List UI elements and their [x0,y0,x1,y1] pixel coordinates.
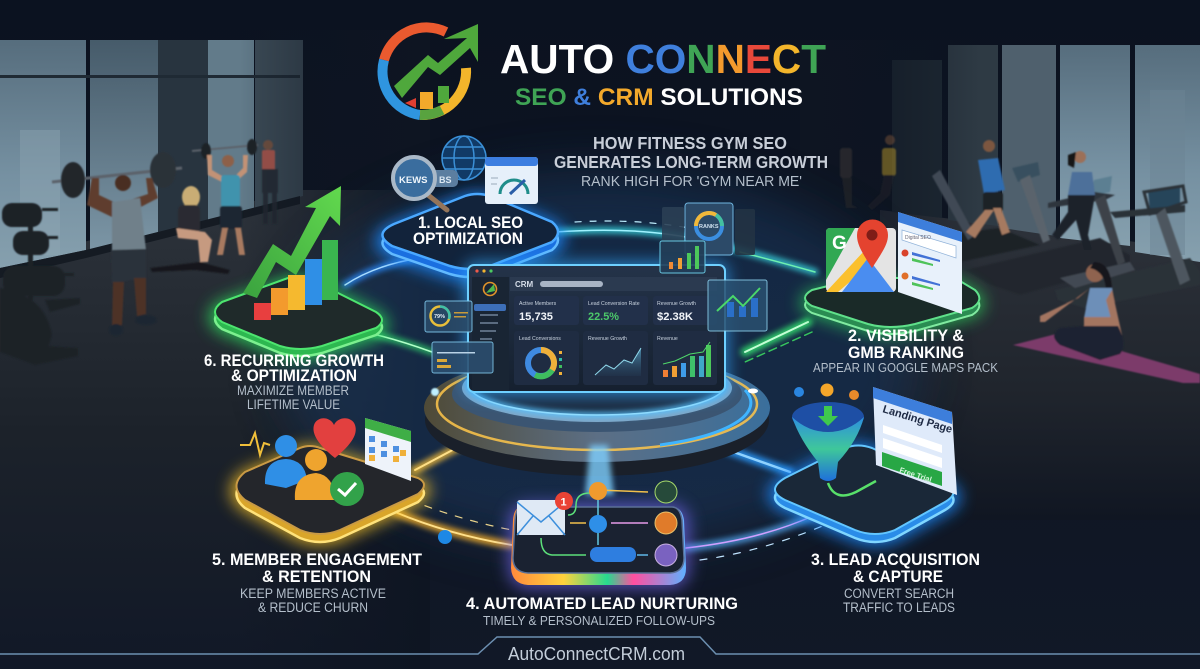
heading: subtitle: HOW FITNESS GYM SEO [593,133,787,153]
text: step 6: LIFETIME VALUE [247,397,340,412]
platform 1: local SEO [382,136,558,277]
chart: growth bars [254,240,338,320]
icon: speed gauge window [485,157,538,204]
text: step 3 [811,550,980,615]
icon: landing page form [873,387,957,495]
figure: dim runners [840,135,896,210]
panel: active members card: Active Members [519,301,557,307]
icon: orange member [295,449,335,500]
text: step 5: & REDUCE CHURN [258,600,368,615]
panel: platform base [511,507,686,585]
icon: keyword magnifier [393,157,458,210]
chart: lead conversions donut: Lead Conversions [519,336,561,342]
icon: globe [442,136,486,180]
heading: subtitle [554,133,828,190]
panel: left donut [425,301,472,332]
figure: standing person [262,140,278,224]
figure: man lifting barbell [52,152,182,336]
icon: map tile with pin: G [832,233,847,254]
floating panels around dashboard [425,203,767,373]
icon: map tile with pin [826,220,896,292]
text: step 4 [466,594,738,628]
panel: conversion rate card: 22.5% [588,311,619,323]
chart: logo bars [405,86,449,109]
text: step 5: 5. MEMBER ENGAGEMENT [212,550,423,569]
connector lines between platforms [345,221,825,560]
icon: ring logo [382,27,466,115]
central hub: pedestal disc [424,354,770,476]
panel: platform base [382,194,558,277]
arrow: 6 to hub connector [345,328,432,352]
text: step 6 [204,351,384,412]
icon: search results browser [898,212,962,314]
text: step 6: & OPTIMIZATION [231,366,357,385]
heading: subtitle: RANK HIGH FOR 'GYM NEAR ME' [581,173,802,190]
platform 6: recurring growth [204,186,384,412]
panel: active members card: 15,735 [519,311,553,323]
text: step 3: & CAPTURE [853,567,943,586]
figure: yoga woman on mat [1013,262,1200,383]
icon: keyword magnifier: BS [439,175,452,185]
text: step 1 title [413,213,523,248]
heading: subtitle: GENERATES LONG-TERM GROWTH [554,152,828,172]
sidebar menu [474,304,506,340]
panel: platform base [775,446,954,542]
logo [382,24,478,115]
icon: mail with badge [517,492,573,535]
panel: ranks donut: RANKS [699,224,719,230]
text: CRM header: CRM [515,280,534,289]
text: step 5: & RETENTION [262,567,371,586]
text: step 6: 6. RECURRING GROWTH [204,351,384,370]
icon: mini logo [484,282,496,296]
panel: platform base [805,278,979,334]
icon: treadmills [932,162,1200,308]
icon: search results browser: Digital SEO [905,235,931,241]
panel: line chart [708,280,767,331]
arrow: 4 to 5 connector [395,500,512,545]
arrow: 3 to 4 connector [686,515,825,560]
figure: runner woman [1052,151,1095,250]
platform 5: engagement [212,418,424,615]
panel: conversion rate card [583,296,648,325]
arrow: 6 to 1 connector [345,258,420,285]
footer [0,637,1200,664]
icon: conversion arrow [828,481,876,495]
panel: platform base [215,277,382,356]
text: step 3: CONVERT SEARCH [844,586,954,601]
panel: revenue growth card: $2.38K [657,311,693,323]
gym scene: treadmills, runners and yoga [840,135,1200,383]
icon: heart [313,418,356,458]
platform 2: visibility [805,212,998,375]
icon: pulse line [240,433,270,455]
chart: revenue bars: Revenue [657,336,678,342]
panel: revenue growth card [653,296,717,325]
panel: conversion rate card: Lead Conversion Rate [588,301,640,307]
text: step 2 [813,326,998,375]
CRM dashboard [468,265,725,392]
chart: revenue growth area [583,331,648,385]
text: step 3: TRAFFIC TO LEADS [843,600,955,615]
platform 3: lead acquisition [775,384,980,615]
icon: landing page form: Free Trial [898,465,933,484]
text: step 5 [212,550,423,615]
text: step 2: APPEAR IN GOOGLE MAPS PACK [813,360,998,375]
icon: growth arrow [243,186,341,298]
icon: landing page form: Landing Page [881,403,954,436]
icon: mail with badge: 1 [560,496,567,508]
text: step 3: 3. LEAD ACQUISITION [811,550,980,569]
arrow: hub to 5 connector [415,434,470,470]
text: step 1 title: 1. LOCAL SEO [418,213,523,232]
icon: light beam [585,445,614,495]
text: step 6: MAXIMIZE MEMBER [237,383,349,398]
chart: revenue bars [653,331,717,385]
gym scene: weight lifters and racks [0,139,278,365]
panel: left donut: 79% [434,314,445,320]
panel: small bar chart [660,241,705,273]
chart: revenue growth area: Revenue Growth [588,336,627,342]
title: brand name: AUTO CONNECT [500,36,826,82]
title: tagline: SEO & CRM SOLUTIONS [515,84,803,111]
panel: platform base [236,446,424,542]
panel: active members card [514,296,579,325]
text: step 2: GMB RANKING [848,343,964,362]
panel: left list [432,342,493,373]
chart: lead conversions donut [514,331,579,385]
figure: runner in blue [966,140,1010,238]
arrow: 2 to hub connector [745,322,812,362]
platform 4: automated nurturing [466,445,738,628]
arrow: 1 to 2 connector [555,221,815,272]
text: step 1 title: OPTIMIZATION [413,229,523,248]
text: step 4: 4. AUTOMATED LEAD NURTURING [466,594,738,613]
footer: AutoConnectCRM.com [508,643,685,664]
icon: rising arrow [394,24,478,98]
text: step 4: TIMELY & PERSONALIZED FOLLOW-UPS [483,613,715,628]
text: step 5: KEEP MEMBERS ACTIVE [240,586,386,601]
icon: blue member [265,435,307,488]
figure: seated woman [150,186,230,274]
panel: revenue growth card: Revenue Growth [657,301,696,307]
figure: person lifting barbell [192,139,258,255]
chart: workflow nodes [541,481,677,566]
icon: check badge [330,472,364,506]
icon: calendar [365,418,411,481]
icon: dumbbell rack [0,203,80,365]
icon: keyword magnifier: KEWS [399,175,428,186]
text: step 2: 2. VISIBILITY & [848,326,964,345]
panel: ranks donut [662,203,755,255]
icon: funnel with coins [792,384,864,481]
arrow: hub to 3 connector [712,427,790,472]
